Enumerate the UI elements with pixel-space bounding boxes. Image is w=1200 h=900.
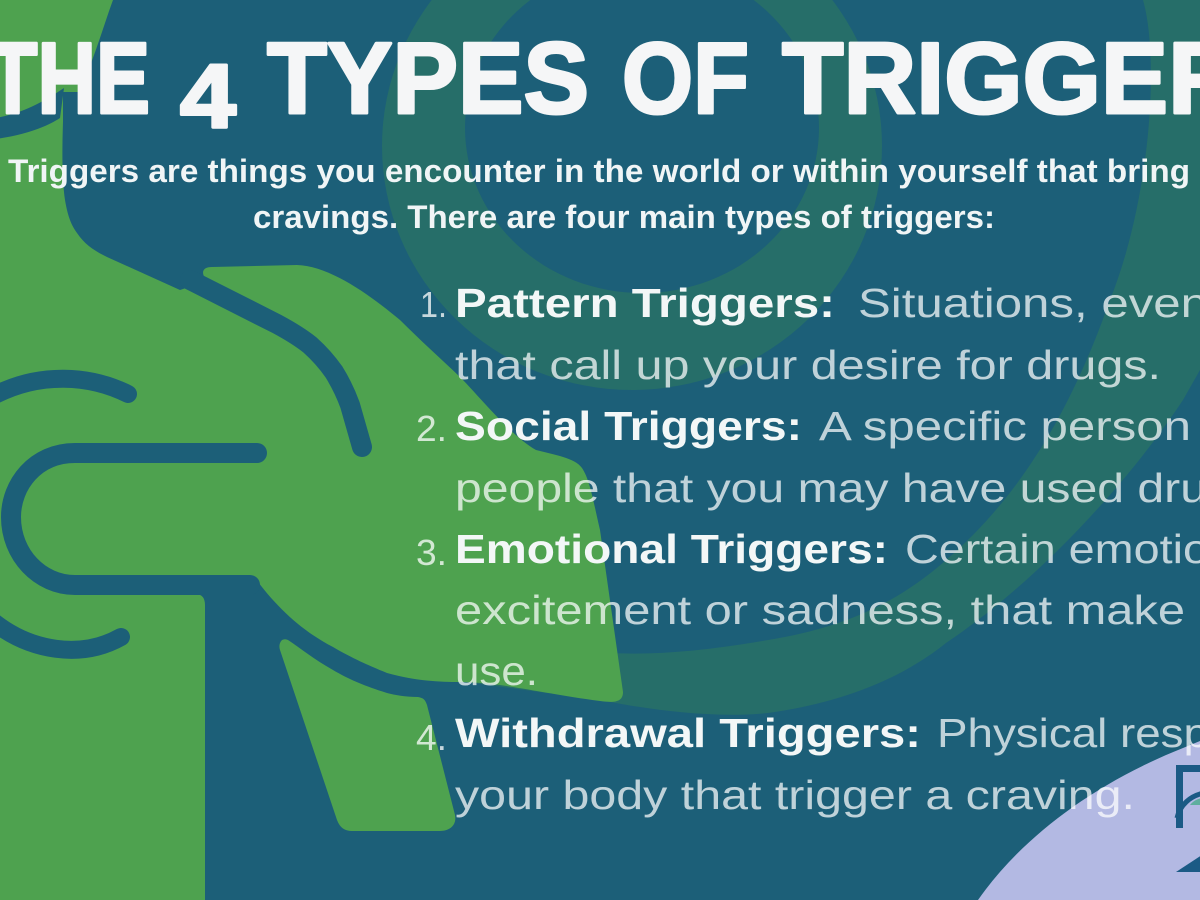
curved head line [190,280,362,447]
list item 4: withdrawal triggers [416,710,1200,818]
intro text: cravings. There are four main types of triggers: [253,199,995,235]
title [0,23,1200,147]
background swirl: outer ring [450,0,1200,715]
list item 3: emotional triggers: Emotional Triggers: [455,526,888,572]
list item 4: withdrawal triggers: your body that trigger a craving. [455,772,1135,818]
list item 3: emotional triggers: use. [455,648,538,694]
list item 3: emotional triggers: excitement or sadness, that make [455,587,1185,633]
head lower wedge [279,639,455,831]
list item 2: social triggers [416,403,1200,511]
intro text [8,153,1190,235]
list item 1: pattern triggers: Situations, even [858,280,1200,326]
list item 2: social triggers: Social Triggers: [455,403,802,449]
list item 4: withdrawal triggers: Physical resp [937,710,1200,756]
list item 2: social triggers: 2. [416,408,447,449]
list item 2: social triggers: people that you may have used dru [455,465,1200,511]
lavender corner shape [978,741,1200,900]
list item 1: pattern triggers [420,280,1200,388]
logo leaf [1190,798,1200,805]
top-left dark band [0,88,64,139]
list item 4: withdrawal triggers: Withdrawal Triggers: [455,710,921,756]
list item 1: pattern triggers: Pattern Triggers: [455,280,835,326]
logo triangle [1176,855,1200,872]
logo frame [1180,768,1200,828]
head body [0,0,623,900]
logo arc [1177,793,1200,818]
logo [1176,768,1200,872]
list item 3: emotional triggers: 3. [416,532,447,573]
title: 4 [180,47,236,147]
list item 3: emotional triggers: Certain emotio [905,526,1200,572]
list item 1: pattern triggers: 1. [420,284,447,325]
C-shaped ear line [11,453,257,585]
title: TYPES [267,23,589,135]
title: OF [622,23,749,135]
intro text: Triggers are things you encounter in the world or within yourself that bring [8,153,1190,189]
list item 3: emotional triggers [416,526,1200,694]
green head silhouette [0,0,623,900]
background swirl: inner ring [382,0,882,390]
upper arc [0,379,128,395]
lower arc [0,623,121,650]
list item 4: withdrawal triggers: 4. [416,717,447,758]
list item 1: pattern triggers: that call up your desire for drugs. [455,342,1161,388]
list item 2: social triggers: A specific person [819,403,1191,449]
